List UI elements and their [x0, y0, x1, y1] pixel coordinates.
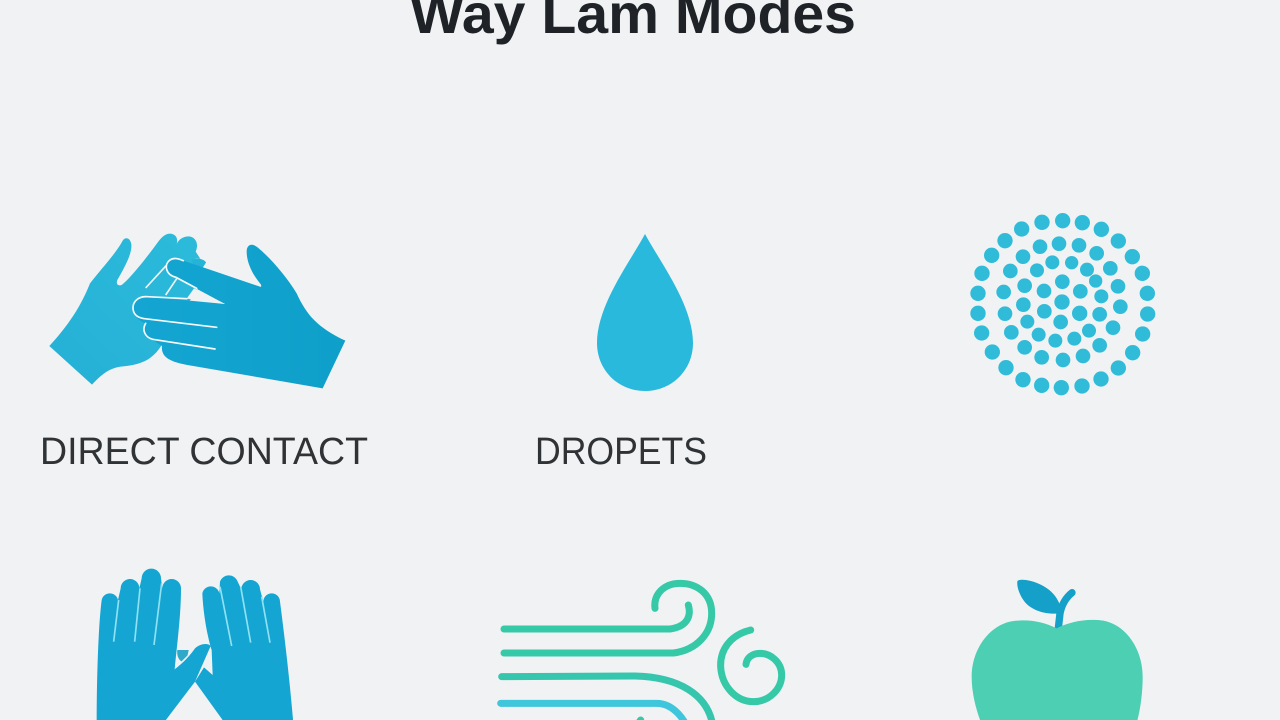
label: direct contact: DIRECT CONTACT [40, 431, 368, 473]
label: droplets: DROPETS [535, 431, 707, 473]
icon: droplet [597, 234, 693, 391]
icon: apple [972, 580, 1143, 720]
icon: airborne wind [501, 583, 782, 720]
icon: direct contact hands [49, 234, 345, 388]
icon: raised hands [97, 569, 293, 720]
icon: particle cloud [970, 213, 1155, 395]
